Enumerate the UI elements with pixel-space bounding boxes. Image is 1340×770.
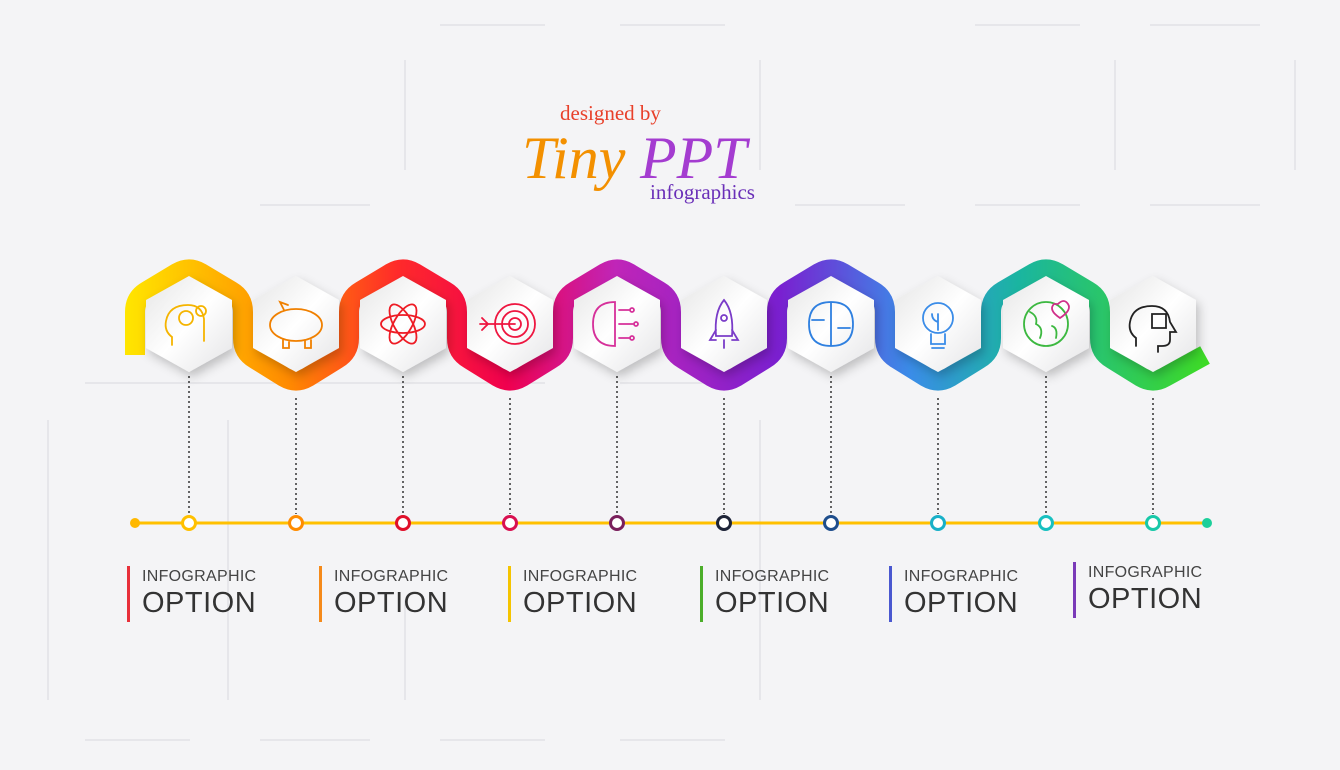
timeline: [130, 376, 1212, 530]
text: OPTION: [904, 587, 1018, 619]
text: INFOGRAPHIC: [334, 568, 448, 585]
logo: Tiny: [522, 125, 626, 191]
text: INFOGRAPHIC: [715, 568, 829, 585]
labels: OPTION: [142, 587, 256, 619]
logo: [522, 101, 755, 204]
ribbon: [135, 270, 1205, 380]
labels: [127, 566, 256, 622]
icons: [166, 300, 1176, 352]
logo: designed by: [560, 101, 661, 125]
text: INFOGRAPHIC: [904, 568, 1018, 585]
labels: INFOGRAPHIC: [142, 568, 256, 585]
text: OPTION: [715, 587, 829, 619]
hexagons: [146, 276, 1196, 372]
text: INFOGRAPHIC: [523, 568, 637, 585]
text: OPTION: [1088, 583, 1202, 615]
text: OPTION: [523, 587, 637, 619]
logo: PPT: [639, 125, 750, 191]
text: INFOGRAPHIC: [1088, 564, 1202, 581]
text: OPTION: [334, 587, 448, 619]
logo: infographics: [650, 180, 755, 204]
